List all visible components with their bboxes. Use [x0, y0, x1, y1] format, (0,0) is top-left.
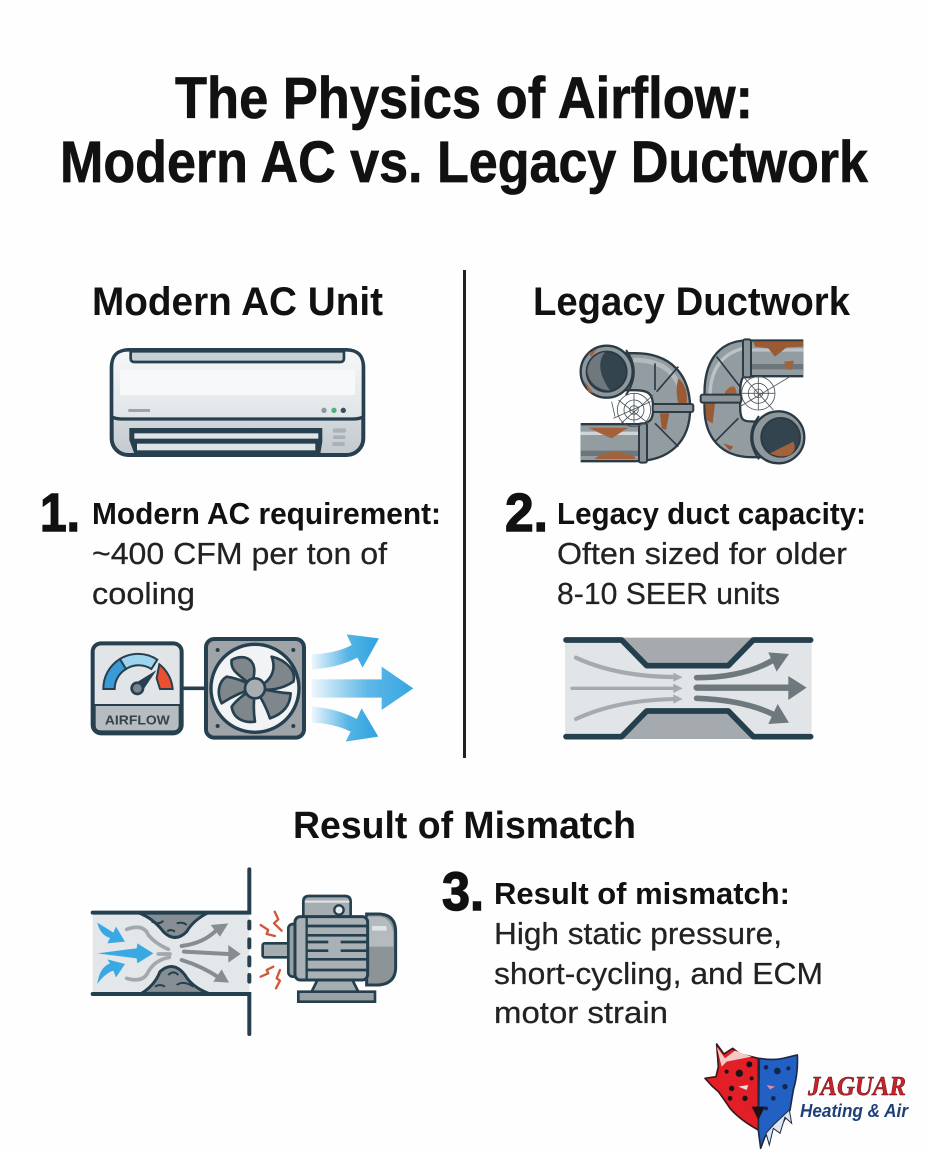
callout 2: legacy duct capacity [505, 483, 866, 611]
callout 3: result of mismatch [442, 862, 823, 1030]
wordmark: JAGUAR: JAGUAR [807, 1071, 906, 1101]
callout 1: modern AC requirement: cooling [92, 576, 195, 611]
callout 3: result of mismatch: 3. [442, 862, 484, 922]
panel: modern AC [40, 280, 441, 742]
callout 1: modern AC requirement: ~400 CFM per ton of [92, 536, 387, 571]
logo: Jaguar Heating & Air [705, 1044, 909, 1148]
icon: clogged duct and strained motor [93, 869, 396, 1034]
icon: rusty pipes with cobwebs [581, 339, 804, 463]
title [60, 66, 869, 195]
callout 2: legacy duct capacity: 2. [505, 483, 548, 543]
icon: constricted duct airflow [565, 638, 812, 739]
callout 1: modern AC requirement: Modern AC requirement: [92, 496, 441, 531]
heading: modern AC unit: Modern AC Unit [92, 280, 383, 324]
title: The Physics of Airflow: [175, 66, 753, 131]
callout 2: legacy duct capacity: Legacy duct capacity: [557, 496, 866, 531]
callout 3: result of mismatch: High static pressure, [494, 916, 782, 951]
callout 3: result of mismatch: motor strain [494, 995, 668, 1030]
icon: wall-mounted AC unit [112, 350, 363, 456]
wordmark: Heating & Air: Heating & Air [800, 1101, 909, 1121]
heading: legacy ductwork: Legacy Ductwork [533, 280, 851, 324]
callout 3: result of mismatch: Result of mismatch: [494, 876, 790, 911]
heading: result of mismatch: Result of Mismatch [293, 805, 636, 847]
panel: result of mismatch [93, 805, 823, 1034]
icon: jaguar head, half red and half blue [705, 1044, 797, 1148]
callout 2: legacy duct capacity: Often sized for older [557, 536, 847, 571]
callout 2: legacy duct capacity: 8-10 SEER units [557, 576, 780, 611]
panel: legacy ductwork [505, 280, 866, 739]
callout 1: modern AC requirement: 1. [40, 483, 80, 543]
callout 1: modern AC requirement [40, 483, 441, 611]
icon: airflow gauge, fan and blue arrows [93, 634, 413, 742]
callout 3: result of mismatch: short-cycling, and ECM [494, 956, 823, 991]
center divider [463, 270, 466, 758]
icon: airflow gauge, fan and blue arrows: AIRFLOW [105, 713, 170, 727]
